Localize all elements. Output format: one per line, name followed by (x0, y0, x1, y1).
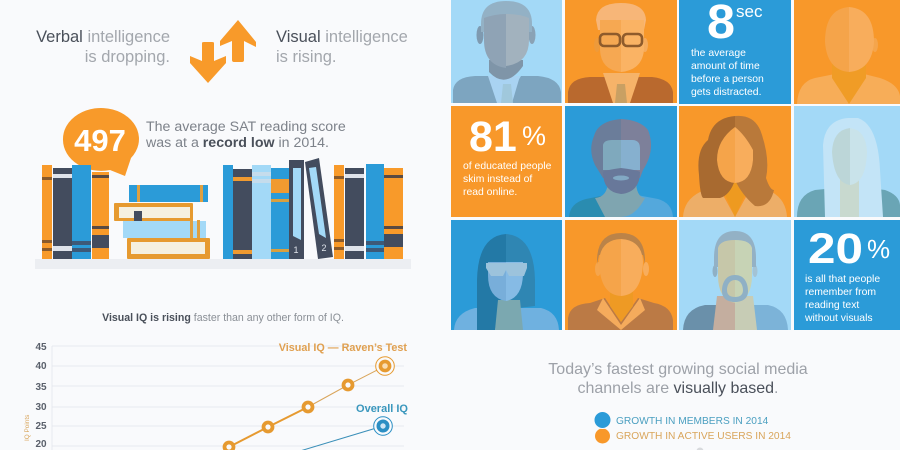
binder 2: 2 (321, 243, 327, 253)
heading: verbal intelligence is dropping: Verbal intelligence (36, 28, 170, 46)
callout: 497 speech bubble: 497 (74, 123, 126, 158)
heading: social media channels: Today’s fastest growing social media (548, 361, 808, 378)
y axis labels: 20 (35, 439, 47, 450)
tile: 20% stat: remember from (805, 287, 876, 298)
y axis labels: 30 (35, 402, 47, 413)
y axis labels: 35 (35, 382, 47, 393)
binder 1: 1 (293, 245, 299, 255)
tile: 20% stat: reading text (805, 300, 859, 311)
tile: 81% stat (451, 106, 562, 217)
tile: 81% stat: skim instead of (463, 174, 532, 185)
tile: 8 sec stat: amount of time (691, 61, 760, 72)
legend item: active users (595, 428, 791, 444)
tile: woman with wavy hair (679, 106, 791, 217)
heading: social media channels (548, 361, 808, 397)
label: overall IQ: Overall IQ (356, 403, 408, 415)
books: left group (42, 165, 109, 259)
chart title: Visual IQ is rising faster than any other form of IQ. (102, 312, 344, 324)
y axis title: IQ Points (24, 415, 31, 441)
heading: social media channels: channels are visually based. (577, 380, 779, 397)
tile: man with glasses (565, 0, 677, 103)
y axis labels: 45 (35, 342, 47, 353)
heading: visual intelligence is rising (276, 28, 408, 66)
panel: photo grid (451, 0, 900, 330)
line chart: IQ points (24, 342, 408, 450)
tile: bearded man (565, 106, 677, 217)
illustration: bookshelf (35, 158, 411, 269)
heading: visual intelligence is rising: Visual intelligence (276, 28, 408, 46)
y axis labels: 25 (35, 421, 47, 432)
tile: 8 sec stat: gets distracted. (691, 87, 761, 98)
heading: verbal intelligence is dropping (36, 28, 170, 66)
legend item: members (594, 412, 769, 428)
tile: 20% stat: % (867, 234, 890, 264)
heading: visual intelligence is rising: is rising. (276, 48, 337, 66)
legend item: active users: GROWTH IN ACTIVE USERS IN 2014 (616, 431, 791, 442)
tile: man with goatee (679, 220, 791, 330)
tile: 81% stat: of educated people (463, 161, 552, 172)
books: horizontal stack (114, 185, 210, 259)
tile: 20% stat: without visuals (804, 313, 873, 324)
tile: 81% stat: % (522, 121, 546, 151)
tile: faceless person (794, 0, 900, 104)
tile: 20% stat (794, 220, 900, 330)
shelf (35, 259, 411, 269)
chart top marker (696, 448, 704, 450)
icon: up and down arrows (190, 20, 256, 83)
callout: 497 speech bubble (63, 108, 139, 176)
tile: 81% stat: read online. (463, 187, 517, 198)
y axis labels (35, 342, 47, 450)
books: right group (334, 164, 403, 259)
tile: 8 sec stat (679, 0, 791, 104)
tile: woman with glasses (451, 220, 562, 330)
text: SAT reading score: was at a record low in 2014. (145, 135, 329, 151)
label: visual IQ: Visual IQ — Raven’s Test (279, 342, 407, 354)
series: visual IQ (224, 357, 394, 450)
tile: man in suit (451, 0, 562, 103)
series: overall IQ (300, 417, 392, 450)
books: middle group (223, 165, 289, 259)
y axis labels: 40 (35, 361, 47, 372)
legend (594, 412, 791, 444)
tile: 8 sec stat: before a person (691, 74, 764, 85)
binder 1 (289, 160, 304, 259)
tile: 81% stat: 81 (469, 113, 517, 161)
grid lines and axis (52, 346, 404, 450)
text: SAT reading score: The average SAT reading score (146, 119, 346, 135)
heading: verbal intelligence is dropping: is dropping. (85, 48, 170, 66)
legend item: members: GROWTH IN MEMBERS IN 2014 (616, 416, 769, 427)
tile: 20% stat: is all that people (805, 274, 880, 285)
binder 2 (305, 158, 333, 259)
tile: blonde woman (794, 106, 900, 217)
tile: 8 sec stat: the average (691, 48, 746, 59)
tile: 8 sec stat: sec (736, 2, 763, 21)
text: SAT reading score (145, 119, 346, 151)
tile: man in sweater (565, 220, 677, 330)
tile: 20% stat: 20 (808, 225, 863, 273)
